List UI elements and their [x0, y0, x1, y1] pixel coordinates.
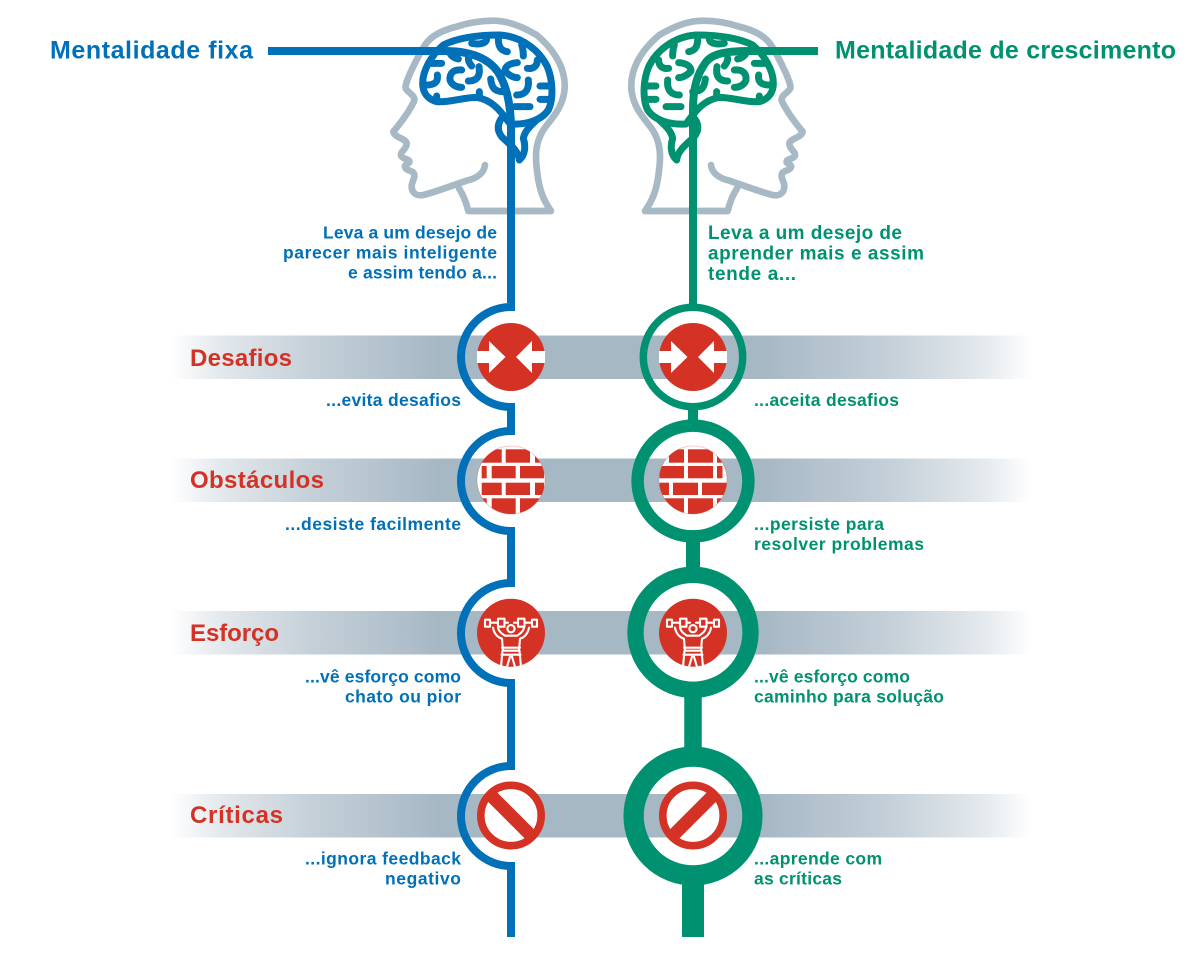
caption: fixed, criticism — [305, 848, 461, 888]
icon: brick wall growth — [659, 446, 729, 514]
icon: prohibition sign fixed — [481, 785, 541, 846]
heading: Obstáculos: Obstáculos — [190, 467, 324, 494]
icon: brick wall fixed — [477, 446, 547, 514]
title: fixed mindset: Mentalidade fixa — [50, 36, 254, 64]
caption: growth, effort — [754, 666, 944, 706]
blue path line — [268, 51, 515, 937]
caption: fixed, effort: ...vê esforço como — [305, 666, 461, 686]
caption: growth, challenges: ...aceita desafios — [754, 390, 899, 410]
icon: arrows fixed — [477, 323, 545, 391]
icon: weightlifter growth — [659, 599, 727, 667]
text: fixed mindset intro — [283, 222, 497, 282]
icon: growth mindset head outline — [631, 21, 803, 211]
caption: growth, criticism: as críticas — [754, 868, 842, 888]
caption: fixed, criticism: negativo — [385, 868, 461, 888]
text: growth mindset intro: aprender mais e assim — [708, 244, 924, 264]
caption: fixed, effort — [305, 666, 461, 706]
icon: fixed mindset brain — [423, 35, 552, 160]
caption: growth, obstacles: resolver problemas — [754, 534, 924, 554]
icon: prohibition sign growth — [663, 785, 723, 846]
caption: fixed, challenges: ...evita desafios — [326, 390, 461, 410]
icon: arrows growth — [659, 323, 727, 391]
text: growth mindset intro — [708, 223, 924, 285]
caption: growth, obstacles — [754, 514, 924, 554]
caption: growth, obstacles: ...persiste para — [754, 514, 884, 534]
heading: Críticas: Críticas — [190, 802, 283, 829]
caption: fixed, criticism: ...ignora feedback — [305, 848, 461, 868]
text: fixed mindset intro: e assim tendo a... — [348, 262, 497, 282]
heading: Desafios: Desafios — [190, 345, 292, 372]
text: growth mindset intro: tende a... — [708, 264, 796, 285]
bands — [170, 336, 1032, 838]
text: growth mindset intro: Leva a um desejo de — [708, 223, 902, 244]
green path line — [634, 51, 818, 937]
icon: growth mindset brain — [644, 35, 773, 160]
icon: fixed mindset head outline — [393, 21, 565, 211]
caption: growth, criticism — [754, 848, 882, 888]
title: growth mindset: Mentalidade de crescimento — [835, 36, 1176, 64]
text: fixed mindset intro: parecer mais inteligente — [283, 242, 497, 262]
caption: fixed, effort: chato ou pior — [345, 686, 461, 706]
caption: fixed, obstacles: ...desiste facilmente — [285, 514, 461, 534]
caption: growth, criticism: ...aprende com — [754, 848, 882, 868]
heading: Esforço: Esforço — [190, 620, 279, 647]
icon: weightlifter fixed — [477, 599, 545, 667]
text: fixed mindset intro: Leva a um desejo de — [323, 222, 497, 242]
caption: growth, effort: caminho para solução — [754, 686, 944, 706]
caption: growth, effort: ...vê esforço como — [754, 666, 910, 686]
